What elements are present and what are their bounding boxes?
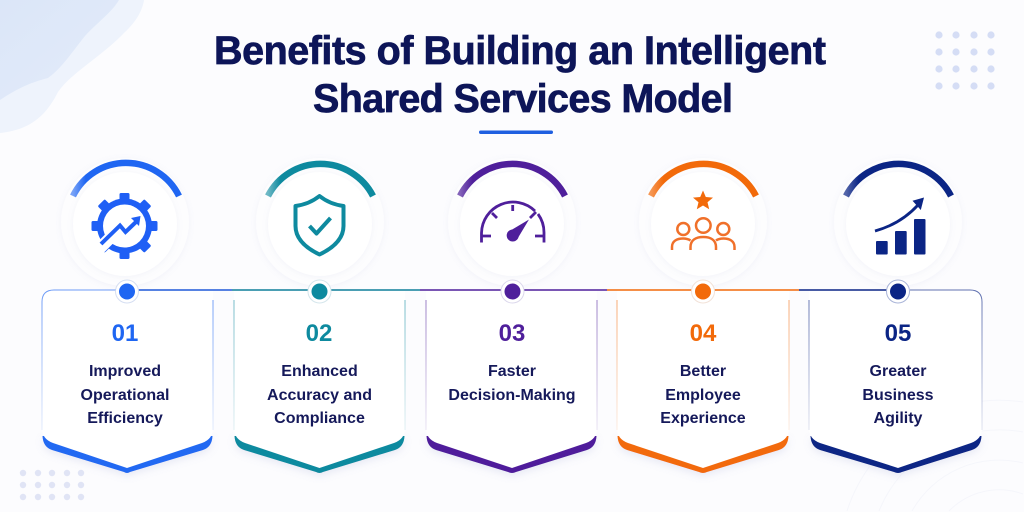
panel 5: greater business agility [809, 290, 982, 473]
card 2 label: Enhanced [281, 363, 358, 380]
panel 2: enhanced accuracy and compliance [234, 290, 405, 473]
card 4 label: Experience [660, 410, 746, 427]
timeline node 1 [116, 280, 138, 303]
card 1 label: Improved [89, 363, 161, 380]
icon: gear with rising arrow [92, 193, 158, 259]
icon circle 5 [834, 158, 962, 286]
title underline [479, 130, 553, 134]
card 3 label: Faster [488, 363, 536, 380]
card 2 label: Accuracy and [267, 387, 372, 404]
card 4 label: Better [680, 363, 726, 380]
card 5 borders [809, 290, 982, 430]
decoration: top-right dots [935, 31, 995, 90]
card 4 accent band [618, 436, 788, 473]
decoration: bottom-left dots [20, 470, 84, 500]
panel 4: better employee experience [617, 290, 789, 473]
icon: team with star [672, 190, 734, 250]
card 4 label: Employee [665, 387, 741, 404]
card 5 label: Business [862, 387, 934, 404]
card 1 body [42, 290, 213, 468]
card 1 label: Operational [81, 387, 169, 404]
card 2 accent band [234, 436, 404, 473]
icon: bar chart with arrow [875, 198, 926, 254]
card 3 borders [426, 300, 597, 430]
card 3 accent band [426, 436, 596, 473]
timeline node 5 [886, 280, 910, 303]
title: Shared Services Model [313, 77, 733, 121]
timeline connector [115, 289, 900, 291]
card 5 label: Greater [870, 363, 926, 380]
card 3 label: Decision-Making [448, 387, 576, 404]
icon: shield with check [296, 196, 344, 254]
card 5 label: Agility [874, 410, 923, 427]
panel 1: improved operational efficiency [42, 290, 213, 473]
title [214, 29, 826, 121]
card 4 body [617, 290, 789, 468]
decoration: bottom-right rings [847, 400, 1023, 511]
card 1 number: 01 [112, 320, 138, 347]
icon: speedometer gauge [482, 202, 544, 242]
timeline node 3 [501, 280, 524, 303]
card 3 body [426, 290, 597, 468]
timeline node 2 [308, 280, 331, 303]
card 4 borders [617, 300, 789, 430]
card 5 accent band [810, 436, 982, 473]
card 4 number: 04 [690, 320, 717, 347]
icon circle 4 [639, 158, 767, 286]
timeline node 4 [692, 280, 714, 303]
card 1 label: Efficiency [87, 410, 163, 427]
title: Benefits of Building an Intelligent [214, 29, 826, 73]
card 3 number: 03 [499, 320, 525, 347]
icon circle 3 [448, 158, 576, 286]
card 2 borders [234, 300, 405, 430]
card 2 body [234, 290, 405, 468]
card 1 accent band [42, 436, 212, 473]
icon circle 2 [256, 158, 384, 286]
card 1 borders [42, 290, 213, 430]
decoration: top-left wave [0, 0, 144, 133]
icon circle 1 [61, 158, 189, 286]
card 5 body [809, 290, 982, 468]
card 5 number: 05 [885, 320, 911, 347]
card 2 label: Compliance [274, 410, 365, 427]
panel 3: faster decision-making [426, 290, 597, 473]
card 2 number: 02 [306, 320, 332, 347]
